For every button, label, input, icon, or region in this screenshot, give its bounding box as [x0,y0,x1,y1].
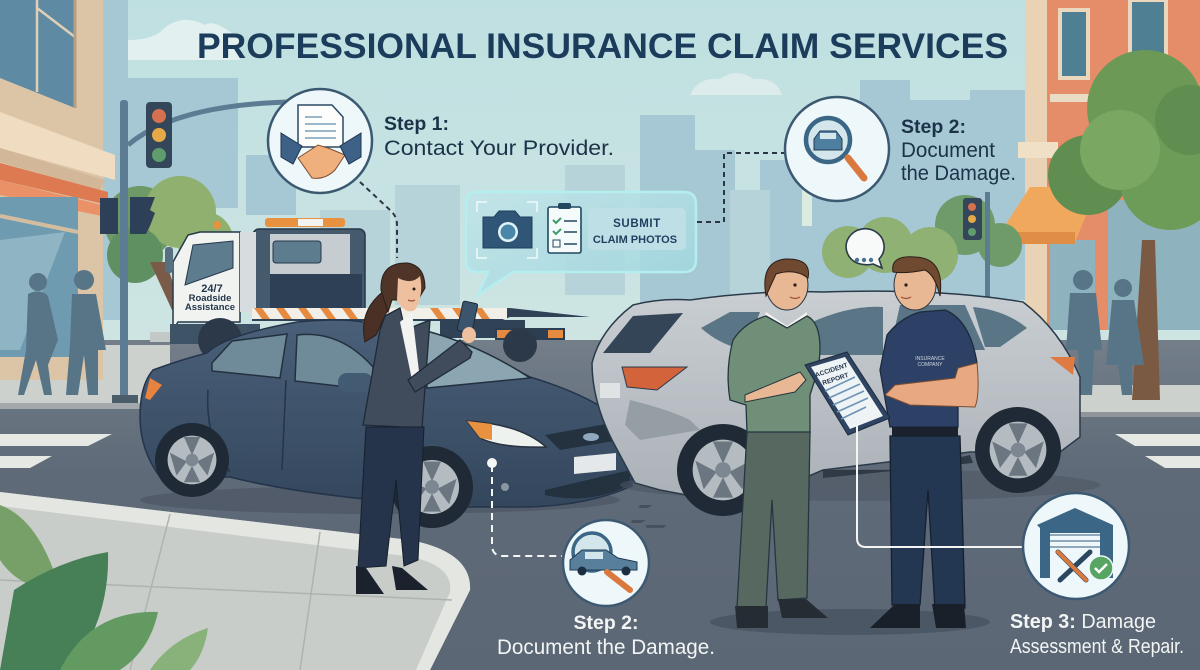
person: agent in navy polo: COMPANY [918,362,943,368]
traffic light: left [100,100,290,403]
pedestrians: silhouettes [18,270,1144,395]
step 1 text: Step 1: [384,113,449,135]
bushes: behind agent [935,195,995,255]
icon: handshake document [268,89,372,193]
car: blue sedan [140,320,632,528]
crosswalk stripes [0,434,112,468]
step 2 bottom text [497,612,715,659]
step 2 top text: Step 2: [901,116,966,138]
step 2 top text: the Damage. [901,162,1016,185]
step 2 top text: Document [901,139,995,162]
submit button [588,208,686,250]
step 2 bottom text: Document the Damage. [497,636,715,659]
clipboard: accident report: ACCIDENT [814,362,849,379]
step 3 text: Step 3: Damage [1010,611,1156,633]
tow truck [165,218,590,362]
clipboard: accident report: REPORT [822,372,850,387]
panel: submit claim photos [466,192,696,295]
tree: right [1132,240,1160,400]
truck label: Assistance [185,302,235,313]
step 1 text: Contact Your Provider. [384,137,614,160]
foliage: foreground [0,505,60,590]
near sidewalk [0,492,470,670]
step 2 bottom text: Step 2: [573,612,639,634]
icon: checklist [548,203,581,253]
truck label: Roadside [189,293,231,304]
road [0,340,1200,670]
step 1 text [384,113,614,160]
clipboard: accident report [805,352,890,435]
icon: camera [477,202,537,258]
icon: car under magnifier small [563,520,649,606]
panel: submit claim photos: SUBMIT [613,218,661,230]
building: right [993,0,1200,330]
building: left [0,0,115,380]
far sidewalks [0,345,170,405]
icon: car under magnifier [785,97,889,201]
flatbed stripe [252,308,590,321]
icon: garage with tools [1023,493,1129,599]
debris [631,505,667,528]
person: agent in navy polo: INSURANCE [915,356,945,362]
truck label: 24/7 [201,283,223,295]
truck label [185,283,235,313]
step 3 text [1010,611,1184,658]
traffic light: right [963,192,990,297]
connector lines [360,153,1022,556]
title: PROFESSIONAL INSURANCE CLAIM SERVICES [197,26,1008,66]
car: silver SUV [592,291,1100,516]
step 2 top text [901,116,1016,185]
person: man in green sweater [728,259,828,628]
person: agent in navy polo [870,257,978,628]
people shadow [710,609,990,635]
connector dot [487,458,497,468]
speech bubble: chat [846,229,884,268]
panel: submit claim photos: CLAIM PHOTOS [593,234,677,246]
person: woman with phone [356,263,478,594]
